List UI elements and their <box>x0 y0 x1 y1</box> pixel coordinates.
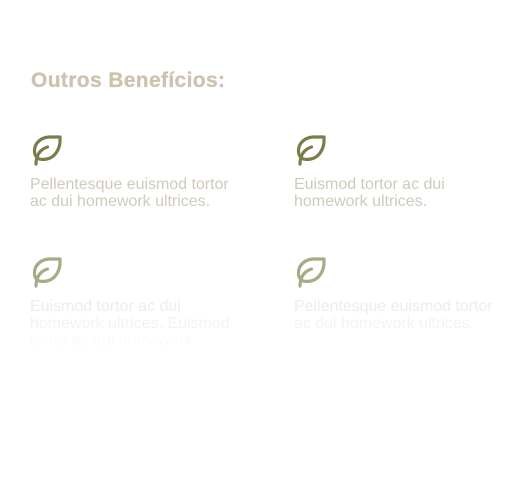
text: benefit 3 description: homework ultrices. Euismod <box>30 315 230 332</box>
text: benefit 1 description <box>30 176 229 210</box>
icon: leaf <box>32 135 62 166</box>
icon: leaf <box>296 135 326 166</box>
panel: benefit 3 <box>30 257 230 349</box>
text: benefit 3 description: tortor ac dui homework <box>30 332 192 349</box>
icon: leaf <box>32 257 62 288</box>
text: benefit 2 description <box>294 176 445 210</box>
panel: benefit 2 <box>294 135 445 210</box>
text: benefit 3 description <box>30 298 230 349</box>
text: benefit 4 description: ac dui homework ultrices. <box>294 315 474 332</box>
text: benefit 4 description: Pellentesque euismod tortor <box>294 298 493 315</box>
text: benefit 1 description: ac dui homework ultrices. <box>30 193 210 210</box>
title: Outros Benefícios: <box>31 69 225 92</box>
panel: benefit 4 <box>294 257 493 332</box>
text: benefit 4 description <box>294 298 493 332</box>
icon: leaf <box>296 257 326 288</box>
text: benefit 2 description: homework ultrices. <box>294 193 427 210</box>
text: benefit 1 description: Pellentesque euismod tortor <box>30 176 229 193</box>
text: benefit 2 description: Euismod tortor ac dui <box>294 176 445 193</box>
panel: benefit 1 <box>30 135 229 210</box>
text: benefit 3 description: Euismod tortor ac dui <box>30 298 181 315</box>
